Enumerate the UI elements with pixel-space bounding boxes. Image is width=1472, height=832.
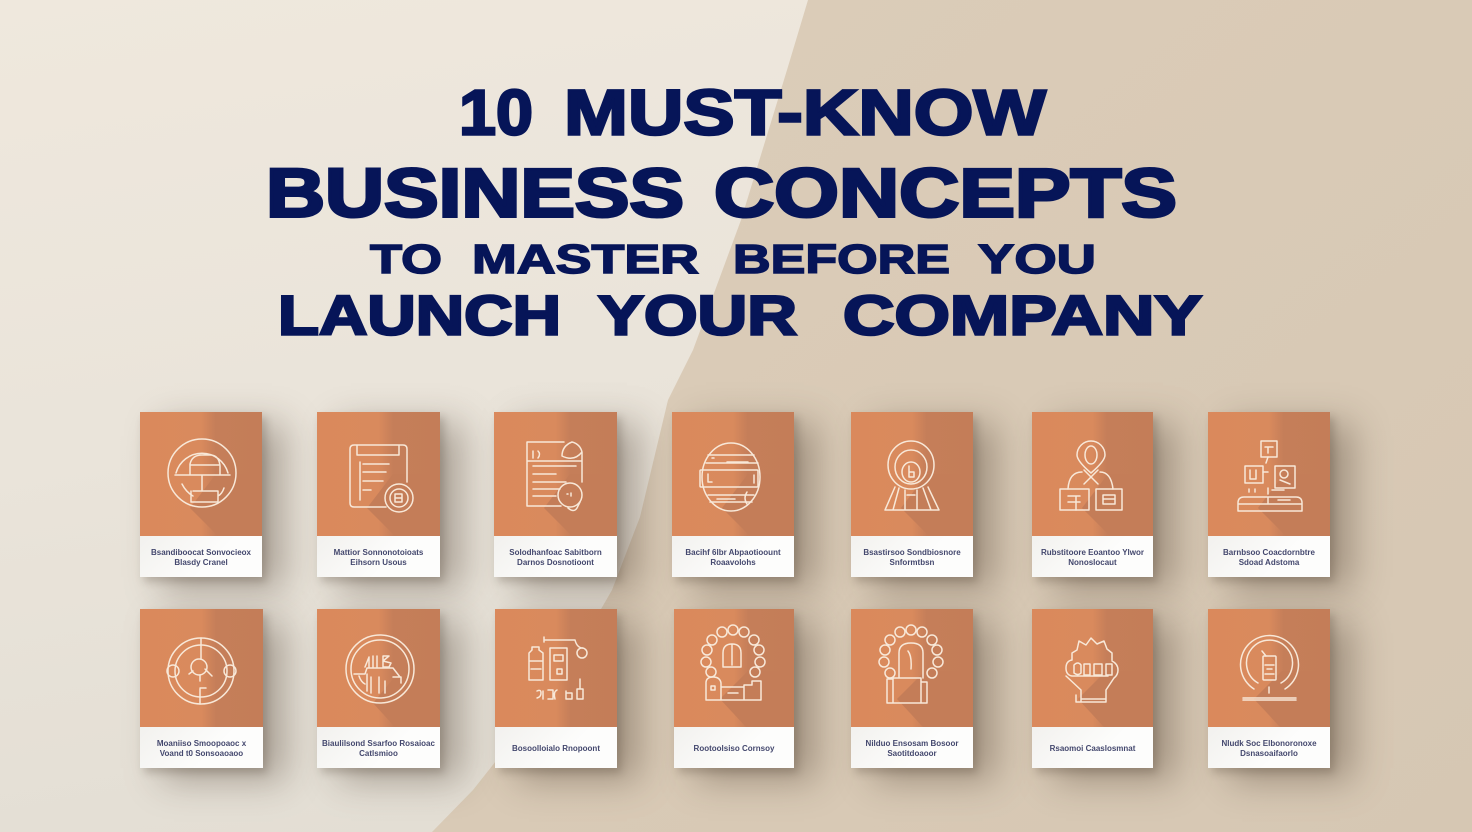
icon: banded globe (699, 442, 761, 528)
title line 3: BEFORE (733, 236, 950, 282)
label: Rsaomoi Caaslosmnat (1050, 744, 1135, 753)
card 9 (317, 609, 440, 768)
label (1032, 536, 1153, 577)
label: Bacihf 6lbr Abpaotioount (685, 548, 781, 556)
title line 4 (278, 284, 1202, 347)
title line 2 (266, 154, 1177, 232)
icon: map pin over boxes (1059, 440, 1123, 528)
title line 1 (459, 77, 1047, 149)
card 14 (1208, 609, 1330, 768)
title line 4: YOUR (598, 284, 797, 347)
title line 2: BUSINESS (266, 154, 684, 232)
label (494, 536, 617, 577)
card 2 (317, 412, 440, 577)
title line 3 (370, 236, 1096, 282)
card 10 (495, 609, 617, 768)
label: Nilduo Ensosam Bosoor (866, 738, 958, 748)
title (266, 77, 1204, 347)
icon: target on tripod (884, 440, 940, 528)
label: Saotitdoaoor (887, 749, 937, 758)
title line 3: TO (370, 236, 442, 282)
title line 4: COMPANY (843, 284, 1202, 347)
icon: building in circle (345, 634, 415, 718)
label (140, 536, 262, 577)
icon: phone in ring (1240, 634, 1300, 726)
label: Bsandiboocat Sonvocieox (151, 548, 251, 556)
label (851, 727, 973, 768)
label: Snformtbsn (890, 558, 934, 567)
label: Roaavolohs (710, 558, 756, 567)
label (140, 727, 263, 768)
icon: certificate with seal (526, 441, 583, 528)
label: Sdoad Adstoma (1239, 558, 1299, 567)
label: Moaniiso Smoopoaoc x (157, 738, 246, 748)
card 12 (851, 609, 973, 768)
label: Nludk Soc Elbonoronoxe (1221, 738, 1317, 748)
label: Blasdy Cranel (174, 558, 228, 567)
label (1208, 727, 1330, 768)
label: Catlsmioo (359, 749, 398, 758)
icon: round dome (167, 438, 237, 528)
icon: wreath with doorway (878, 624, 944, 724)
label: Barnbsoo Coacdornbtre (1223, 548, 1315, 556)
card 4 (672, 412, 794, 577)
title line 3: YOU (978, 236, 1096, 282)
label (851, 536, 973, 577)
icon: wreath with buildings (700, 624, 766, 723)
label (495, 727, 617, 768)
label: Dsnasoaifaorlo (1240, 749, 1298, 758)
label: Bosoolloialo Rnopoont (512, 744, 600, 753)
card 6 (1032, 412, 1153, 577)
title line 4: LAUNCH (278, 284, 561, 347)
title line 3: MASTER (472, 236, 699, 282)
icon: linked boxes on platform (1237, 440, 1303, 528)
label (317, 536, 440, 577)
icon: raised fist (1065, 637, 1119, 724)
label (1032, 727, 1153, 768)
icon: bottle, form and tools (528, 636, 588, 700)
icon: document with badge (349, 444, 414, 528)
label: Eihsorn Usous (350, 558, 407, 567)
label (672, 536, 794, 577)
card 5 (851, 412, 973, 577)
label (1208, 536, 1330, 577)
label: Bsastirsoo Sondbiosnore (863, 548, 961, 556)
card 8 (140, 609, 263, 768)
card 3 (494, 412, 617, 577)
card 1 (140, 412, 262, 577)
icon: ring with side nodes (166, 637, 237, 705)
label: Mattior Sonnonotoioats (334, 548, 423, 556)
label: Solodhanfoac Sabitborn (509, 548, 602, 556)
label: Nonoslocaut (1068, 558, 1117, 567)
label: Biaulilsond Ssarfoo Rosaioac (322, 738, 435, 748)
title line 2: CONCEPTS (714, 154, 1177, 232)
label: Darnos Dosnotioont (517, 558, 594, 567)
label: Rootoolsiso Cornsoy (694, 744, 774, 753)
label (317, 727, 440, 768)
title line 1: MUST-KNOW (564, 77, 1047, 149)
card 13 (1032, 609, 1153, 768)
card 11 (674, 609, 794, 768)
title line 1: 10 (459, 77, 533, 149)
label: Rubstitoore Eoantoo Ylwor (1041, 548, 1144, 556)
label: Voand t0 Sonsoaoaoo (160, 749, 243, 758)
label (674, 727, 794, 768)
card 7 (1208, 412, 1330, 577)
